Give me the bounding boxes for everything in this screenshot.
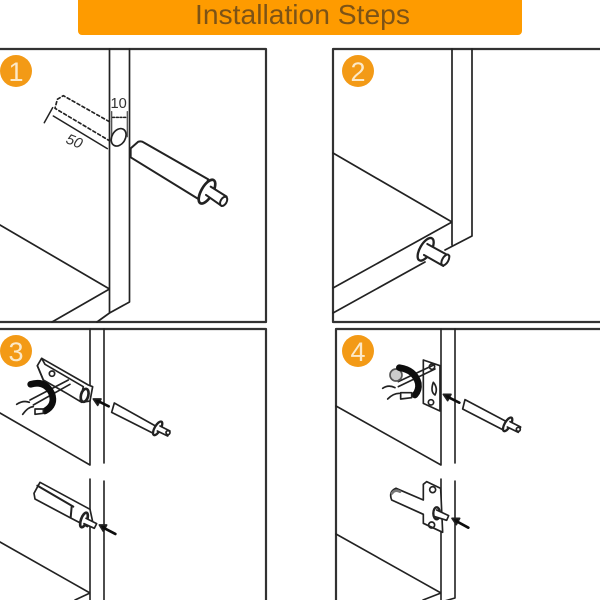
icon: badge 2 [342, 55, 374, 87]
icon: installed damper tip [414, 236, 451, 267]
title banner [78, 0, 522, 35]
icon: mounted plate bracket with damper and arrow lower [391, 482, 468, 532]
icon: badge 4: 4 [350, 337, 366, 367]
icon: damper and arrow upper [443, 394, 521, 432]
icon: damper and arrow upper [93, 399, 170, 436]
icon: damper cylinder [131, 141, 229, 207]
panel: step 4 [336, 329, 600, 600]
icon: badge 1: 1 [8, 57, 24, 87]
panel: step 1 [0, 49, 266, 322]
icon: badge 3 [0, 335, 32, 367]
panel: step 3 [0, 329, 266, 600]
icon: badge 1 [0, 55, 32, 87]
dimension drawing: drill hole 10 by 50: 10 [110, 96, 127, 112]
icon: badge 4 [342, 335, 374, 367]
panel: step 2 [333, 49, 600, 322]
icon: plate bracket with screwdriver and rotation arrow [383, 360, 440, 411]
icon: mounted bracket with damper and arrow lower [34, 482, 115, 534]
dimension drawing: drill hole 10 by 50: 50 [63, 132, 85, 153]
icon: bracket with screwdriver and rotation arrow [17, 358, 93, 414]
icon: badge 2: 2 [350, 57, 366, 87]
icon: badge 3: 3 [8, 337, 24, 367]
dimension drawing: drill hole 10 by 50 [44, 96, 129, 153]
